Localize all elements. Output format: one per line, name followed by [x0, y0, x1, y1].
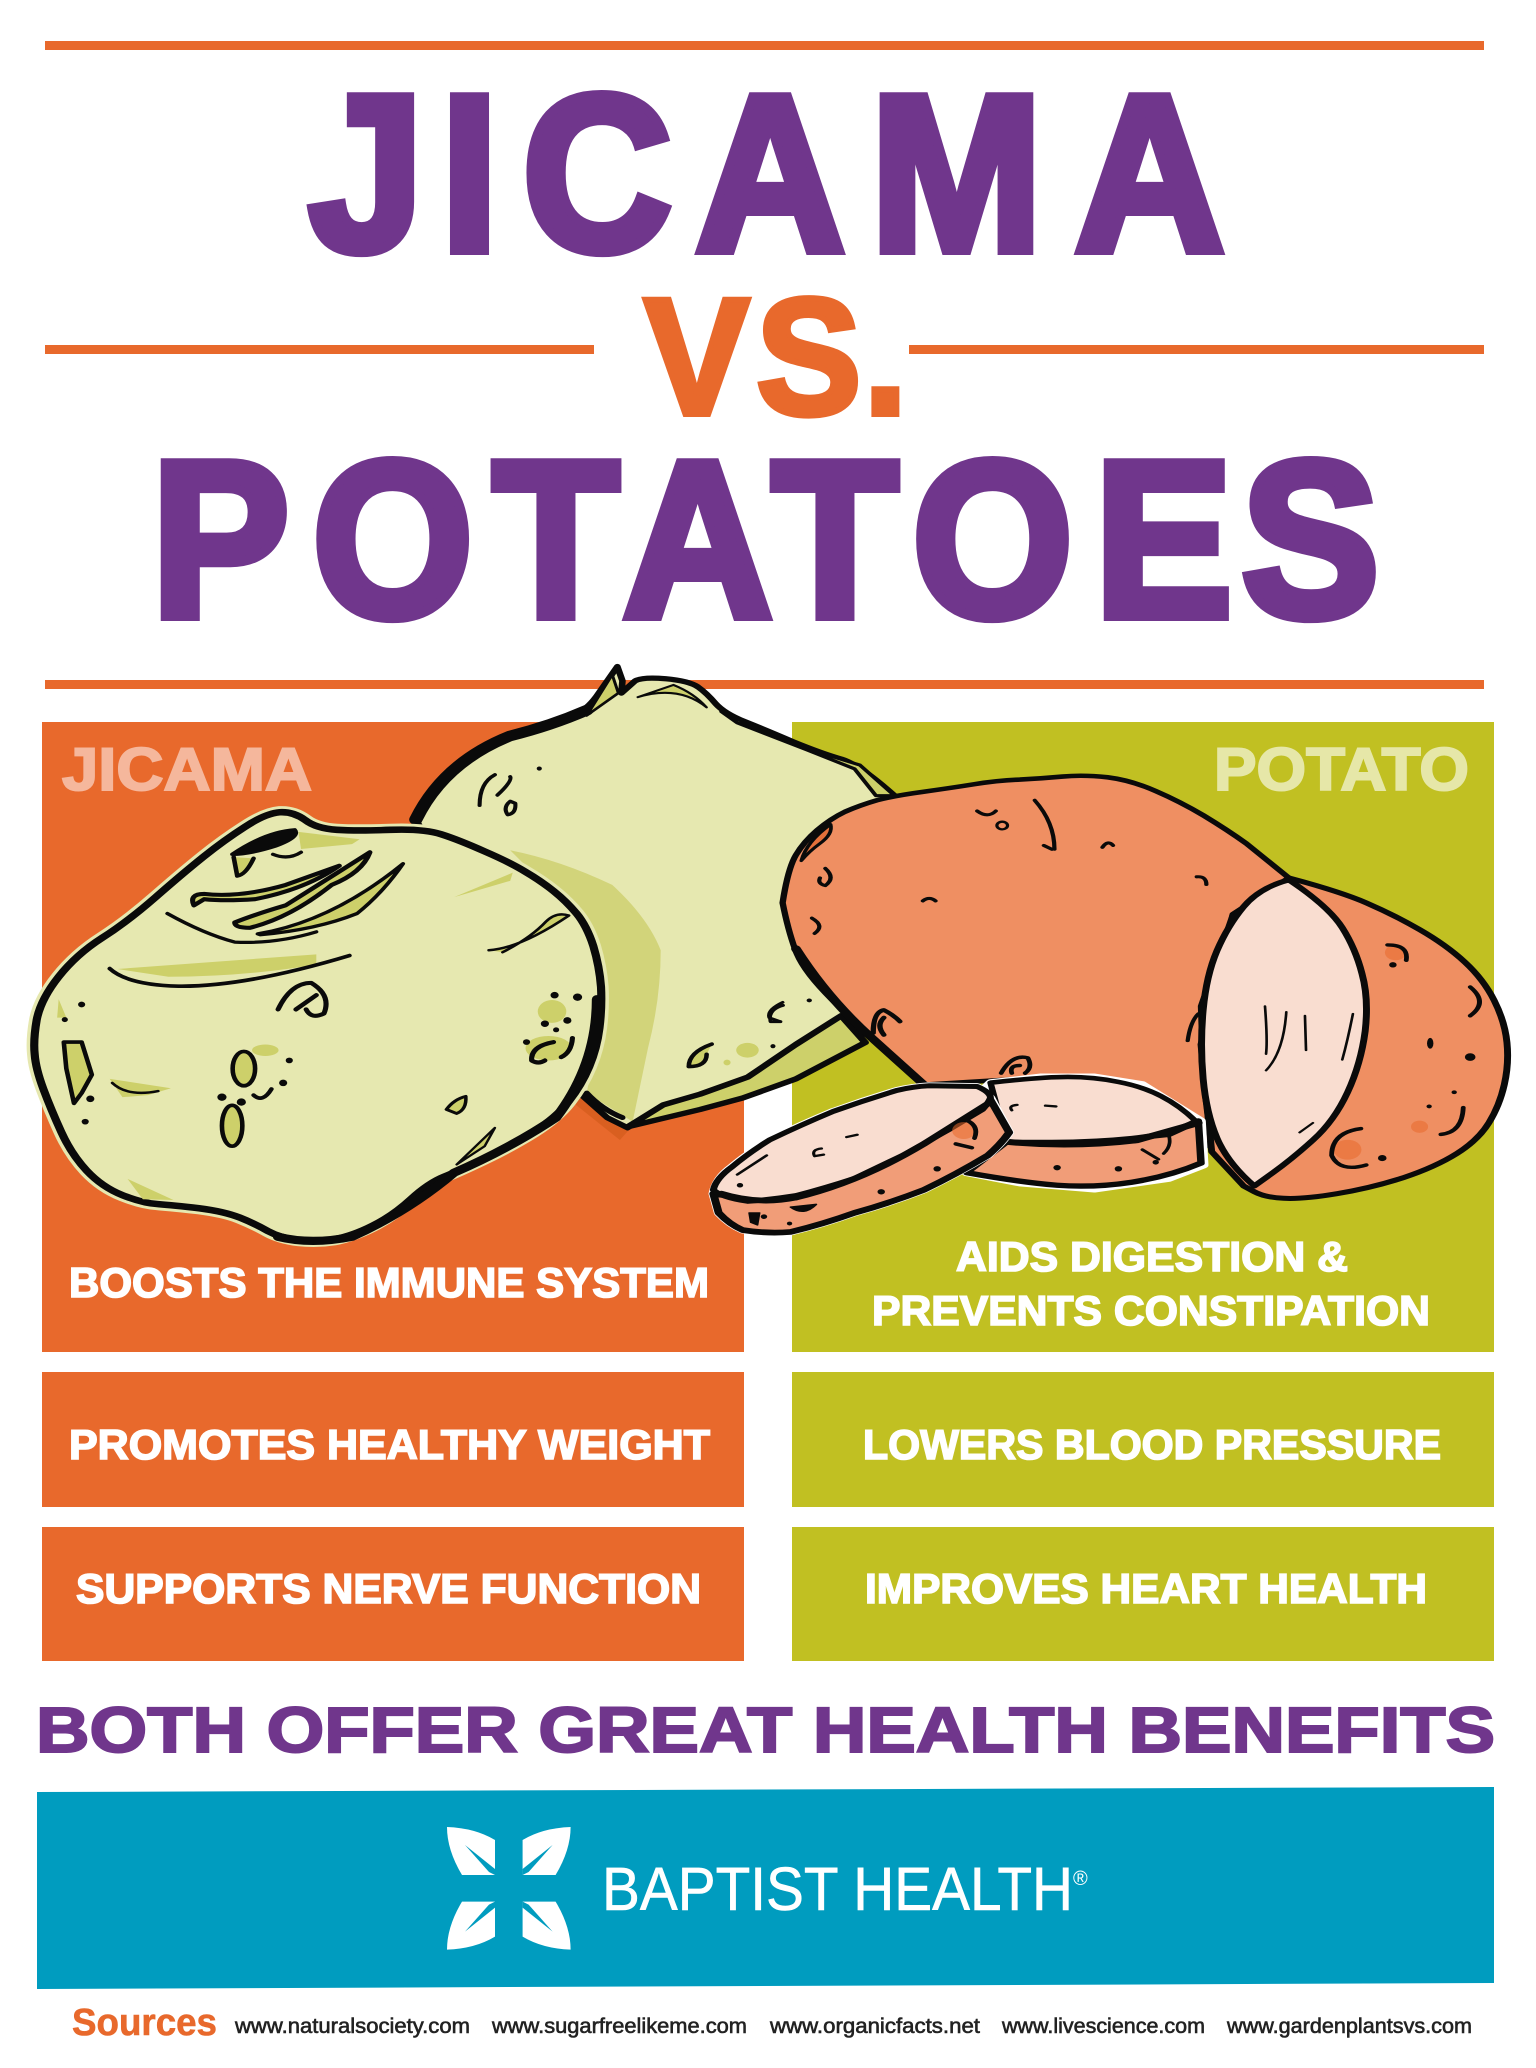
box: lowers blood pressure: [792, 1372, 1494, 1507]
panel: potato top: [792, 722, 1494, 1352]
title: VS.: VS.: [644, 264, 907, 450]
source url: livescience: www.livescience.com: [1001, 2015, 1205, 2038]
box: supports nerve function: SUPPORTS NERVE FUNCTION: [76, 1565, 701, 1612]
banner: Baptist Health: [37, 1787, 1494, 1989]
illustration: back jicama rind bands: [628, 711, 895, 1127]
sources label: Sources: [72, 2002, 217, 2044]
benefit: prevents constipation: PREVENTS CONSTIPATION: [872, 1287, 1430, 1334]
source url: sugarfreelikeme: www.sugarfreelikeme.com: [491, 2015, 747, 2038]
tagline: BOTH OFFER GREAT HEALTH BENEFITS: [36, 1694, 1495, 1766]
title: POTATOES: POTATOES: [152, 416, 1379, 664]
cut half: flesh: [1202, 880, 1366, 1186]
panel label: POTATO: POTATO: [1214, 736, 1469, 803]
source url: gardenplantsvs: www.gardenplantsvs.com: [1226, 2015, 1472, 2038]
illustration: back jicama: [416, 667, 895, 1140]
box: improves heart health: [792, 1527, 1494, 1661]
logo wordmark: BAPTIST HEALTH: [602, 1855, 1073, 1923]
illustration: potato and slices: [713, 776, 1508, 1233]
right rule beside VS.: [909, 345, 1484, 354]
whole potato body: [783, 776, 1289, 1148]
box: supports nerve function: [42, 1527, 744, 1661]
icon: Baptist Health logo: [447, 1827, 571, 1950]
rule under title: [45, 680, 1484, 689]
box: improves heart health: IMPROVES HEART HEALTH: [865, 1565, 1427, 1612]
box: lowers blood pressure: LOWERS BLOOD PRESSURE: [863, 1421, 1441, 1468]
benefit: boosts immune system: BOOSTS THE IMMUNE SYSTEM: [69, 1259, 709, 1306]
source url: organicfacts: www.organicfacts.net: [769, 2015, 980, 2038]
registered mark: ®: [1073, 1868, 1088, 1890]
panel: jicama top: [42, 722, 744, 1352]
box: promotes healthy weight: [42, 1372, 744, 1507]
title: JICAMA: JICAMA: [309, 50, 1224, 298]
source url: naturalsociety: www.naturalsociety.com: [234, 2015, 470, 2038]
left rule beside VS.: [45, 345, 594, 354]
box: promotes healthy weight: PROMOTES HEALTHY WEIGHT: [69, 1421, 710, 1468]
panel label: JICAMA: JICAMA: [62, 736, 312, 803]
front slice: [713, 1086, 1009, 1233]
benefit: aids digestion: AIDS DIGESTION &: [956, 1233, 1348, 1280]
cut half: skin: [1201, 878, 1508, 1198]
top rule: [45, 41, 1484, 50]
illustration: front jicama: [34, 812, 601, 1241]
back slice: [951, 1077, 1204, 1189]
